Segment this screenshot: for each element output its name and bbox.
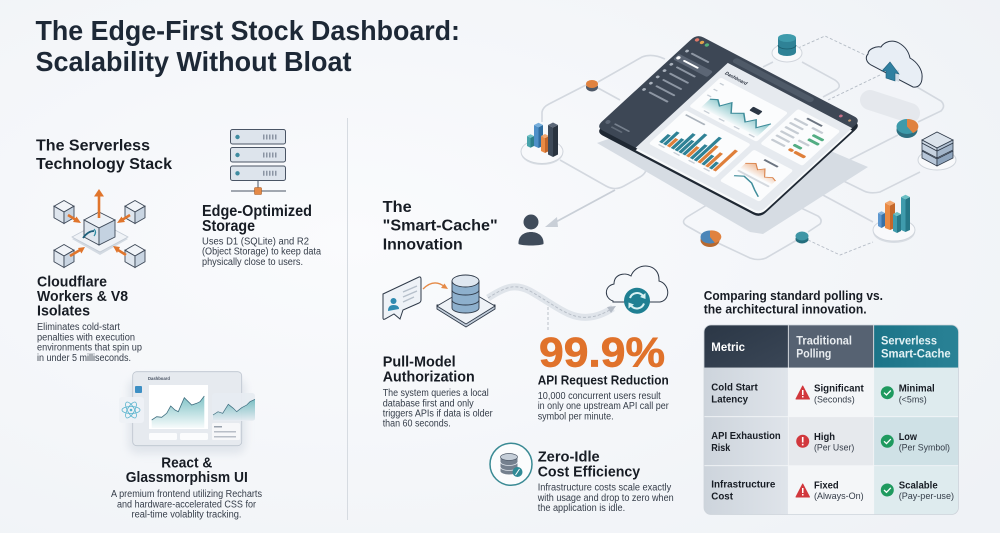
text: pull-model authorization: The system queries a local (383, 388, 489, 399)
icon: cloud with refresh (606, 266, 668, 314)
text: zero-idle cost efficiency (537, 449, 674, 514)
heading: serverless technology stack (36, 138, 172, 173)
text: edge-optimized storage: Storage (202, 218, 255, 235)
text: pull-model authorization: triggers APIs if data is older (383, 409, 493, 420)
text: cloudflare workers (37, 274, 142, 364)
stat: 99.9 percent: API Request Reduction (538, 372, 669, 387)
smart-cache values: (<5ms) (899, 394, 927, 405)
icon: teal node (796, 232, 808, 244)
title (36, 15, 460, 77)
row labels (711, 381, 781, 503)
smart-cache values (881, 382, 954, 502)
text: zero-idle cost efficiency: with usage and drop to zero when (537, 493, 674, 504)
icon: upload cloud (866, 41, 922, 87)
stat: 99.9 percent (538, 329, 669, 422)
icon: database platform (437, 275, 495, 327)
icon: server stack (918, 132, 956, 170)
text: edge-optimized storage: Uses D1 (SQLite) and R2 (202, 236, 309, 247)
table header: Metric (711, 340, 745, 354)
text: react and glassmorphism: A premium frontend utilizing Recharts (111, 489, 262, 500)
row labels: API Exhaustion (711, 430, 781, 442)
text: pull-model authorization: Pull-Model (383, 354, 456, 371)
table header: Smart-Cache (881, 346, 951, 360)
text: zero-idle cost efficiency: Infrastructure costs scale exactly (538, 483, 671, 494)
table header: Serverless (881, 333, 937, 347)
table cells (704, 325, 959, 515)
row labels: Infrastructure (711, 479, 775, 491)
sidebar menu (603, 48, 719, 141)
icon: user (518, 214, 544, 246)
text: react and glassmorphism: real-time volablity tracking. (132, 510, 242, 521)
traditional polling values: (Always-On) (814, 491, 864, 502)
text: react and glassmorphism: Glassmorphism UI (126, 469, 248, 486)
text: cloudflare workers: in under 5 milliseconds. (37, 353, 131, 364)
traditional polling values (796, 382, 864, 502)
card: mini charts (720, 150, 793, 202)
heading: serverless technology stack: Technology Stack (36, 156, 172, 173)
chart card: bars (649, 110, 751, 178)
smart-cache values: Low (899, 431, 918, 443)
stat: 99.9 percent: in only one upstream API call per (538, 401, 669, 412)
comparison table (704, 325, 959, 515)
table header: Traditional (796, 333, 852, 347)
text: pull-model authorization: database first and only (383, 398, 474, 409)
icon: glassmorphism dashboard: Dashboard (148, 376, 170, 381)
heading: smart-cache innovation: Innovation (383, 236, 463, 253)
card: status list (760, 109, 840, 166)
stat: 99.9 percent: 10,000 concurrent users result (538, 391, 661, 402)
heading: comparison (704, 288, 883, 317)
text: cloudflare workers: Cloudflare (37, 274, 107, 290)
text: cloudflare workers: Isolates (37, 302, 90, 320)
arrow: to user (545, 190, 615, 227)
heading: comparison: the architectural innovation. (704, 302, 867, 317)
text: react and glassmorphism: and hardware-accelerated CSS for (117, 499, 257, 510)
icon: database on platform (772, 34, 802, 62)
isometric dashboard (596, 34, 868, 234)
row labels: Cost (711, 491, 733, 503)
text: cloudflare workers: penalties with execution (37, 332, 135, 343)
traditional polling values: (Seconds) (814, 394, 855, 405)
row labels: Risk (711, 442, 730, 454)
text: edge-optimized storage: Edge-Optimized (202, 203, 312, 220)
text: zero-idle cost efficiency: Cost Efficiency (538, 463, 641, 480)
text: react and glassmorphism: React & (161, 455, 212, 472)
text: pull-model authorization (383, 354, 493, 430)
icon: chat card (383, 277, 421, 319)
icon: cloudflare workers cube (54, 189, 145, 268)
icon: orange node (586, 80, 598, 92)
text: cloudflare workers: Workers & V8 (37, 288, 128, 305)
row labels: Cold Start (711, 381, 758, 393)
icon: pie right (896, 119, 918, 138)
smart-cache values: (Pay-per-use) (899, 491, 954, 502)
traditional polling values: (Per User) (814, 442, 854, 453)
icon: bar chart right (873, 195, 915, 243)
text: edge-optimized storage: physically close to users. (202, 257, 303, 268)
text: pull-model authorization: Authorization (383, 368, 475, 385)
table header (711, 333, 951, 360)
stat: 99.9 percent: 99.9% (539, 329, 665, 376)
icon: server rack (230, 130, 286, 194)
heading: serverless technology stack: The Serverless (36, 138, 150, 154)
icon: bar chart left (521, 122, 563, 165)
arrow: dashed ribbon to cloud (488, 287, 616, 330)
text: edge-optimized storage: (Object Storage) to keep data (202, 247, 321, 258)
heading: smart-cache innovation (383, 199, 498, 253)
connection lines (542, 36, 944, 260)
heading: smart-cache innovation: The (383, 199, 412, 216)
title: The Edge-First Stock Dashboard: (36, 15, 460, 46)
table header: Polling (796, 346, 831, 360)
search bar (731, 57, 815, 103)
row labels: Latency (711, 393, 748, 405)
text: react and glassmorphism (111, 455, 262, 521)
text: zero-idle cost efficiency: the application is idle. (538, 503, 625, 514)
text: cloudflare workers: Eliminates cold-start (37, 322, 120, 333)
smart-cache values: Scalable (899, 480, 938, 492)
icon: zero-idle database (490, 443, 532, 485)
text: edge-optimized storage (202, 203, 321, 268)
icon: glassmorphism dashboard (119, 372, 255, 454)
smart-cache values: Minimal (899, 382, 935, 394)
icon: pie bottom (700, 230, 721, 247)
traditional polling values: High (814, 431, 835, 443)
text: pull-model authorization: than 60 seconds. (383, 419, 451, 430)
stat: 99.9 percent: symbol per minute. (538, 411, 614, 422)
text: cloudflare workers: environments that spin up (37, 343, 142, 354)
arrow: chat to database (423, 283, 448, 289)
chart card: area (689, 77, 788, 142)
heading: comparison: Comparing standard polling vs. (704, 288, 883, 303)
traditional polling values: Fixed (814, 480, 839, 492)
heading: smart-cache innovation: "Smart-Cache" (383, 218, 498, 235)
isometric dashboard: Dashboard (723, 71, 749, 87)
smart-cache values: (Per Symbol) (899, 442, 950, 453)
traditional polling values: Significant (814, 382, 864, 394)
title: Scalability Without Bloat (36, 46, 352, 77)
text: zero-idle cost efficiency: Zero-Idle (538, 449, 600, 466)
